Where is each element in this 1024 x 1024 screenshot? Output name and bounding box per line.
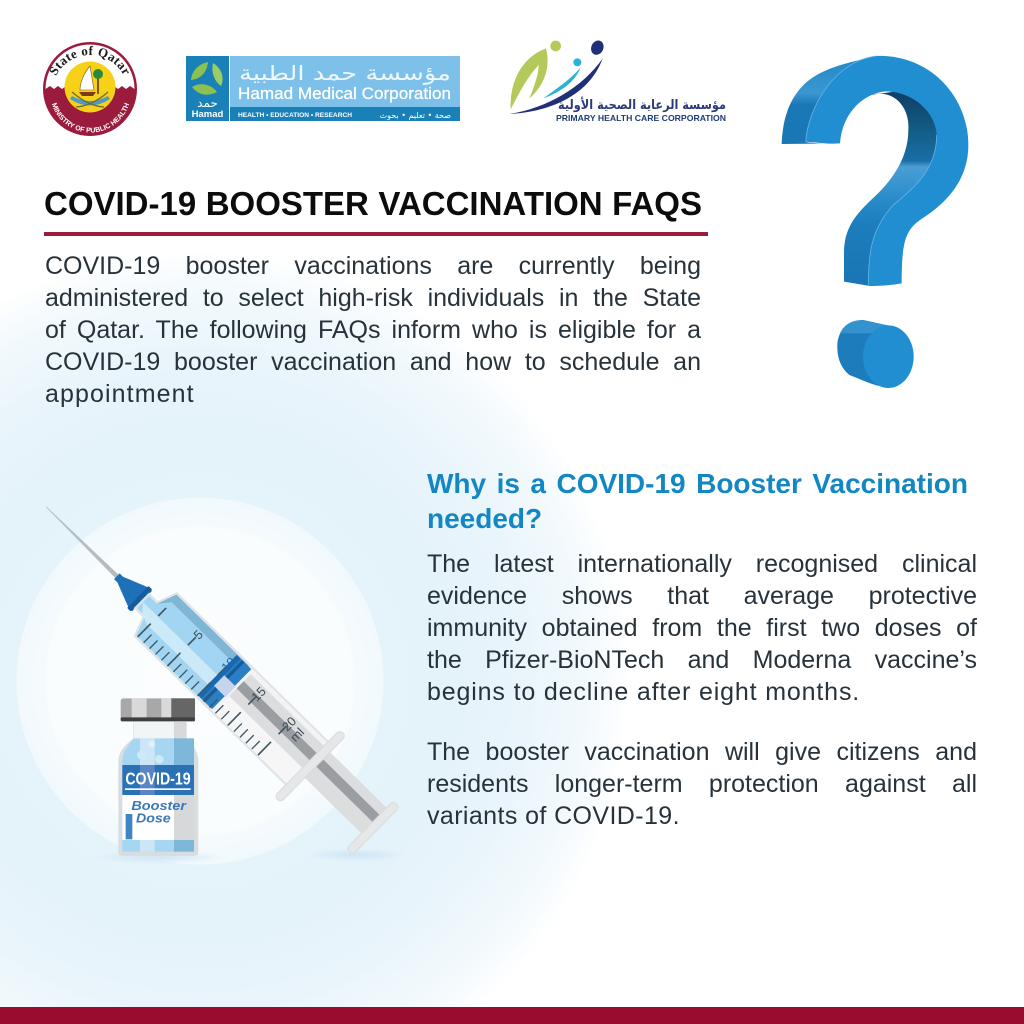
answer paragraph 1: evidence shows that average protective	[427, 582, 977, 610]
logo: Ministry of Public Health: MINISTRY OF PUBLIC HEALTH	[52, 102, 130, 132]
logo: Ministry of Public Health	[43, 42, 137, 136]
answer paragraph 1	[427, 550, 977, 706]
logo: Hamad Medical Corporation: Hamad	[192, 109, 224, 120]
logo: Primary Health Care Corporation: PRIMARY HEALTH CARE CORPORATION	[556, 113, 726, 123]
illustration: syringe and vial	[13, 473, 409, 864]
logo: Hamad Medical Corporation: HEALTH • EDUCATION • RESEARCH	[238, 112, 352, 119]
question heading: Why is a COVID-19 Booster Vaccination	[427, 468, 968, 499]
answer paragraph 1: immunity obtained from the first two doses of	[427, 614, 977, 642]
intro paragraph	[45, 252, 702, 408]
answer paragraph 2: residents longer-term protection against all	[427, 770, 977, 798]
logo: Hamad Medical Corporation: صحة • تعليم • بحوث	[380, 111, 451, 120]
vial: Booster	[131, 799, 187, 813]
answer paragraph 2	[427, 738, 977, 830]
answer paragraph 1: begins to decline after eight months.	[427, 678, 860, 706]
title: COVID-19 BOOSTER VACCINATION FAQS	[44, 185, 702, 222]
logo: Ministry of Public Health: State of Qatar	[50, 46, 129, 76]
intro paragraph: COVID-19 booster vaccination and how to schedule an	[45, 348, 701, 376]
syringe: 20	[279, 714, 299, 734]
question heading: needed?	[427, 503, 542, 534]
vial: COVID-19	[125, 769, 191, 789]
logo: Hamad Medical Corporation: Hamad Medical Corporation	[238, 84, 451, 103]
syringe: 10	[219, 655, 239, 675]
intro paragraph: administered to select high-risk individuals in the State	[45, 284, 701, 312]
footer bar	[0, 1007, 1024, 1024]
syringe: 15	[249, 684, 269, 704]
question heading	[427, 468, 968, 534]
syringe: ml	[288, 725, 307, 745]
logo: Hamad Medical Corporation	[186, 56, 460, 121]
answer paragraph 2: variants of COVID-19.	[427, 802, 680, 830]
title rule	[44, 232, 708, 236]
syringe: 5	[191, 628, 206, 642]
logo: Hamad Medical Corporation: مؤسسة حمد الطبية	[239, 61, 451, 85]
logo: Primary Health Care Corporation	[509, 38, 726, 123]
icon: 3D blue question mark	[782, 56, 968, 388]
intro paragraph: of Qatar. The following FAQs inform who is eligible for a	[45, 316, 701, 344]
answer paragraph 2: The booster vaccination will give citizens and	[427, 738, 977, 766]
answer paragraph 1: the Pfizer-BioNTech and Moderna vaccine’s	[427, 646, 977, 674]
answer paragraph 1: The latest internationally recognised clinical	[427, 550, 977, 578]
vial: Dose	[136, 812, 171, 826]
intro paragraph: COVID-19 booster vaccinations are currently being	[45, 252, 701, 280]
syringe	[13, 473, 409, 864]
intro paragraph: appointment	[45, 380, 195, 408]
vial	[118, 698, 198, 856]
logo: Primary Health Care Corporation: مؤسسة الرعاية الصحية الأولية	[558, 96, 726, 113]
logo: Hamad Medical Corporation: حمد	[197, 96, 218, 110]
